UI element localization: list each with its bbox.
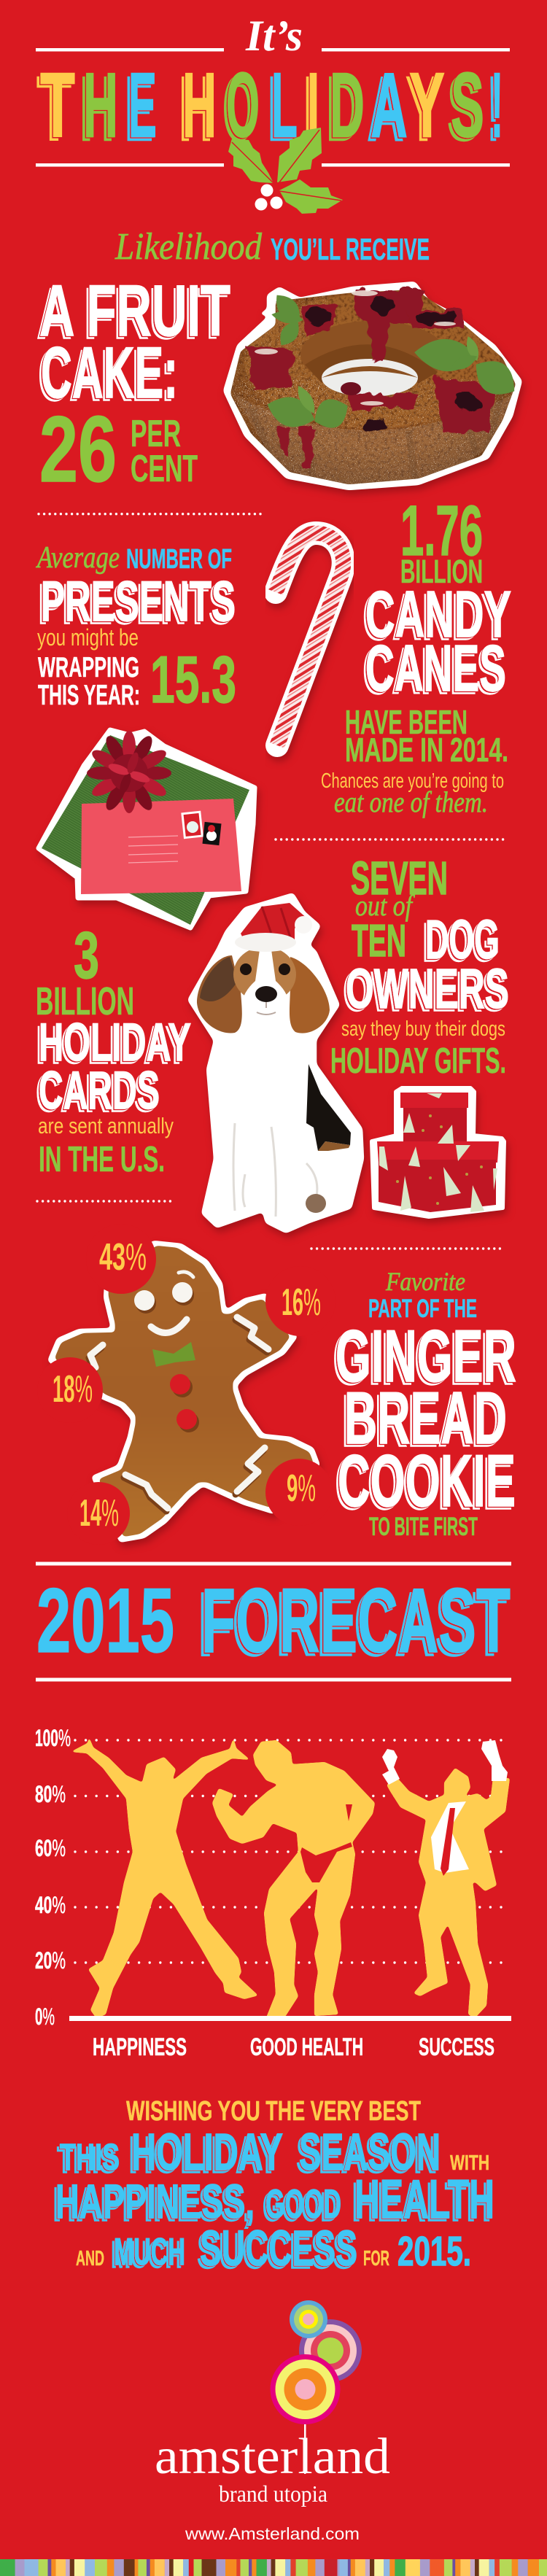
title: THE HOLIDAYS!: H [83,54,118,156]
bite percentages: 18% [53,1368,93,1411]
stat: seven out of ten: TEN [352,916,406,966]
bite percentages [53,1236,321,1535]
text: eat one of them: eat one of them. [334,785,488,818]
heading: likelihood you'll receive: YOU’LL RECEIVE [271,232,430,266]
mint leaves [263,289,524,435]
section: presents [36,541,255,928]
stat: seven out of ten: SEVEN [351,852,448,904]
heading: average number of [36,541,232,575]
script word: It's: It’s [245,12,303,60]
stat: 26 per cent: CENT [131,448,198,490]
heading: average number of: Average [36,541,120,575]
text: GINGER BREAD COOKIE [335,1316,516,1522]
bite percentages: 16% [282,1281,321,1324]
top rules [36,48,510,51]
x axis labels: SUCCESS [419,2033,494,2061]
line: and much success for 2015: AND [76,2247,104,2270]
ears [197,955,242,1033]
text: HOLIDAY CARDS: HOLIDAY [39,1013,191,1072]
text: you might be: you might be [37,624,139,651]
icon: candy cane [276,533,344,745]
section: fruit cake [39,226,525,502]
stat: seven out of ten: out of [355,889,415,922]
text: HOLIDAY CARDS [39,1013,191,1120]
text: to bite first: TO BITE FIRST [369,1513,478,1541]
footer color stripes [0,2559,547,2576]
bite percentages: 9% [287,1467,316,1510]
text: have been made in 2014 [345,703,508,769]
line: happiness good health: HAPPINESS, [55,2174,255,2228]
stat: 3 billion: 3 [74,919,99,993]
section: gingerbread cookie [37,1224,516,1545]
santa hat [241,903,309,941]
chart: forecast silhouettes [35,1725,511,2061]
title: THE HOLIDAYS!: O [226,54,260,156]
x axis labels [93,2033,494,2061]
text: DOG OWNERS: DOG [425,909,500,970]
title: 2015 FORECAST [36,1570,511,1672]
text: in the u.s.: IN THE U.S. [39,1140,165,1179]
body shading [233,1123,317,1217]
image: gift with envelope [39,730,255,928]
text: A FRUIT CAKE [39,270,230,413]
text: have been made in 2014: HAVE BEEN [345,703,468,741]
section: dog owners [36,852,509,1233]
line: and much success for 2015 [76,2220,471,2276]
jam glaze [247,290,495,469]
line: happiness good health: GOOD [265,2181,341,2227]
x axis labels: HAPPINESS [93,2033,187,2061]
text: wrapping this year [38,652,140,711]
y axis labels [35,1725,71,2030]
bite percentages: 14% [79,1492,119,1535]
smile [151,1319,187,1332]
heading: favorite part of the: PART OF THE [368,1295,477,1323]
silhouette: good health [212,1740,375,2020]
line: this holiday season with [60,2124,489,2181]
y axis labels: 40% [35,1892,66,1918]
cake hole [300,321,446,388]
stat: 26 per cent: PER [131,413,181,455]
title: THE HOLIDAYS!: I [307,54,319,156]
gridlines [75,1740,511,1963]
stat: 3 billion: BILLION [36,979,134,1023]
stat: 26 per cent [39,397,198,502]
section: 2015 forecast [35,1562,511,2061]
heading: likelihood you'll receive: Likelihood [115,226,263,268]
eyes and brow [134,1272,194,1314]
line: and much success for 2015: MUCH [114,2231,185,2273]
line: and much success for 2015: SUCCESS [200,2220,357,2276]
silhouette: success [382,1740,510,2018]
stat: 1.76 billion [400,491,483,590]
closing message [55,2096,494,2276]
image: wrapped gift boxes [372,1088,504,1217]
line: this holiday season with: THIS [60,2136,120,2178]
divider: dots [37,1200,174,1203]
y axis labels: 100% [35,1725,71,1751]
lollipops [270,2300,362,2474]
url: www.Amsterland.com [185,2524,360,2543]
line: this holiday season with: WITH [450,2152,489,2175]
title: 2015 FORECAST: 2015 [36,1570,174,1672]
icing [89,1317,268,1511]
heading: favorite part of the: Favorite [385,1267,465,1296]
text: PRESENTS: PRESENTS [41,569,236,633]
bottom rules [36,163,510,166]
line: this holiday season with: SEASON [299,2124,441,2181]
image: gingerbread man [37,1224,335,1545]
y axis labels: 80% [35,1781,66,1807]
text: A FRUIT CAKE: A FRUIT [39,270,230,351]
black patch [306,1064,351,1151]
heading: likelihood you'll receive [115,226,430,268]
title: THE HOLIDAYS!: L [271,54,298,156]
x axis labels: GOOD HEALTH [250,2033,363,2061]
line: this holiday season with: HOLIDAY [131,2124,283,2181]
baseline [69,2016,511,2021]
heading: favorite part of the [368,1267,477,1323]
text: are sent annually: are sent annually [38,1113,174,1138]
trees on wrap [379,1093,497,1212]
envelope lines [128,836,178,863]
text: wrapping this year: THIS YEAR: [38,680,140,711]
divider: dots [276,838,507,841]
divider: dots [39,513,264,515]
title: THE HOLIDAYS!: T [40,54,75,156]
line: and much success for 2015: 2015. [397,2228,471,2275]
title: THE HOLIDAYS!: S [451,54,484,156]
bite circles [37,1224,335,1545]
text: HOLIDAY CARDS: CARDS [39,1061,160,1120]
title: THE HOLIDAYS!: Y [409,54,445,156]
icon: holly [228,128,343,214]
stat: 15.3: 15.3 [150,643,236,717]
stat: 3 billion [36,919,134,1023]
image: beagle with santa hat [187,893,364,1233]
y axis labels: 60% [35,1835,66,1861]
bow tie [152,1342,195,1367]
line: happiness good health [55,2168,494,2230]
tagline: brand utopia [219,2480,327,2507]
title: THE HOLIDAYS!: D [330,54,365,156]
text: A FRUIT CAKE: CAKE: [41,332,178,413]
heading: average number of: NUMBER OF [126,544,232,575]
text: DOG OWNERS [346,909,509,1020]
text: wrapping this year: WRAPPING [38,652,139,683]
line: and much success for 2015: FOR [363,2247,389,2270]
line: wishing you the very best: WISHING YOU THE VERY BEST [126,2096,421,2127]
title: THE HOLIDAYS!: E [128,54,157,156]
logo: amsterland [155,2300,390,2543]
header: It's The Holidays: ! [491,54,503,156]
rule [36,1562,511,1565]
bite percentages: 43% [99,1236,147,1279]
header: It's The Holidays [36,12,510,214]
rule [36,1677,511,1682]
stat: 1.76 billion: BILLION [400,553,483,590]
title: THE HOLIDAYS!: H [182,54,217,156]
buttons [170,1374,199,1432]
head [233,947,296,1002]
y axis labels: 20% [35,1947,66,1974]
stamps [181,811,222,845]
title: THE HOLIDAYS!: A [371,54,408,156]
text: CANDY CANES [365,578,511,705]
stat: 1.76 billion: 1.76 [400,491,483,570]
divider: dots [311,1247,504,1250]
stat: seven out of ten [351,852,448,966]
silhouette: happiness [71,1737,258,2018]
red bow [87,731,171,813]
section: candy canes [276,491,511,818]
y axis labels: 0% [35,2003,55,2030]
image: bundt fruit cake [219,282,525,496]
wordmark: amsterland [155,2429,390,2485]
title: THE HOLIDAYS! [40,54,503,156]
stat: 26 per cent: 26 [39,397,117,502]
